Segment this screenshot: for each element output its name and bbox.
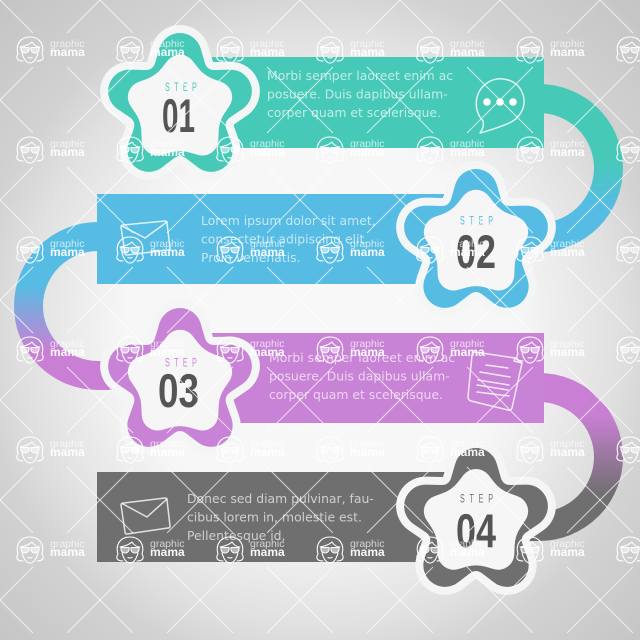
- watermark tiles: mama: [450, 345, 485, 359]
- watermark tiles: graphic: [50, 238, 84, 250]
- watermark tiles: graphic: [50, 338, 84, 350]
- step 4 star badge: STEP: [460, 493, 493, 506]
- watermark tiles: mama: [150, 345, 185, 359]
- panel: step 2 banner: [97, 194, 470, 284]
- watermark tiles: mama: [250, 45, 285, 59]
- text block: step 3: [269, 350, 455, 402]
- watermark tiles: mama: [250, 345, 285, 359]
- text block: step 2: consectetur adipiscing elit.: [201, 232, 368, 246]
- watermark tiles: mama: [550, 45, 585, 59]
- panel: step 1 banner: [200, 57, 544, 148]
- watermark tiles: mama: [150, 245, 185, 259]
- text block: step 2: [201, 213, 376, 265]
- watermark tiles: mama: [150, 545, 185, 559]
- icon: document: [468, 352, 522, 410]
- watermark tiles: mama: [350, 45, 385, 59]
- text block: step 3: Morbi semper laoreet enim ac: [269, 350, 455, 365]
- step 1 star badge: 01: [162, 89, 195, 142]
- watermark tiles: mama: [50, 545, 85, 559]
- watermark tiles: mama: [50, 445, 85, 459]
- step 2 star badge: STEP: [460, 215, 493, 228]
- text block: step 4: Pellentesque id,: [187, 528, 285, 543]
- watermark tiles: mama: [250, 145, 285, 159]
- text block: step 1: [267, 68, 453, 120]
- watermark tiles: graphic: [450, 538, 484, 550]
- step 4 star badge: 04: [456, 504, 496, 557]
- step 4 star badge: [404, 448, 548, 587]
- watermark tiles: graphic: [350, 238, 384, 250]
- watermark tiles: mama: [50, 345, 85, 359]
- text block: step 3: corper quam et scelerisque.: [269, 387, 443, 402]
- watermark tiles: graphic: [550, 538, 584, 550]
- watermark tiles: mama: [350, 545, 385, 559]
- watermark tiles: graphic: [150, 38, 184, 50]
- panel: step 4 banner: [97, 472, 470, 562]
- watermark tiles: graphic: [350, 38, 384, 50]
- step 1 star badge: STEP: [165, 81, 197, 95]
- watermark tiles: mama: [250, 545, 285, 559]
- watermark tiles: mama: [550, 345, 585, 359]
- watermark tiles: mama: [550, 145, 585, 159]
- text block: step 4: [187, 491, 374, 543]
- watermark tiles: graphic: [50, 38, 84, 50]
- watermark tiles: graphic: [150, 138, 184, 150]
- watermark tiles: graphic: [250, 238, 284, 250]
- watermark tiles: graphic: [350, 538, 384, 550]
- watermark tiles: mama: [450, 445, 485, 459]
- watermark tiles: graphic: [550, 238, 584, 250]
- watermark tiles: graphic: [250, 438, 284, 450]
- step 3 star badge: [108, 308, 252, 447]
- watermark tiles: mama: [550, 245, 585, 259]
- watermark tiles: graphic: [150, 538, 184, 550]
- watermark tiles: mama: [450, 45, 485, 59]
- text block: step 4: cibus lorem in, molestie est.: [187, 510, 362, 524]
- watermark tiles: mama: [50, 145, 85, 159]
- watermark tiles: graphic: [550, 338, 584, 350]
- watermark tiles: mama: [150, 45, 185, 59]
- watermark tiles: graphic: [150, 438, 184, 450]
- watermark tiles: graphic: [50, 438, 84, 450]
- watermark tiles: graphic: [250, 138, 284, 150]
- watermark tiles: graphic: [450, 438, 484, 450]
- watermark tiles: mama: [450, 145, 485, 159]
- text block: step 1: corper quam et scelerisque.: [267, 105, 441, 120]
- step 2 star badge: [404, 169, 548, 308]
- watermark tiles: mama: [350, 345, 385, 359]
- watermark tiles: mama: [150, 145, 185, 159]
- watermark tiles: graphic: [550, 138, 584, 150]
- watermark tiles: mama: [350, 145, 385, 159]
- watermark tiles: mama: [150, 445, 185, 459]
- watermark tiles: mama: [450, 545, 485, 559]
- watermark tiles: graphic: [150, 338, 184, 350]
- watermark tiles: graphic: [450, 38, 484, 50]
- icon: envelope on gray banner: [121, 498, 170, 534]
- icon: envelope on blue banner: [121, 221, 170, 255]
- step 3 star badge: 03: [158, 364, 199, 417]
- text block: step 4: Donec sed diam pulvinar, fau-: [187, 491, 374, 506]
- text block: step 2: Lorem ipsum dolor sit amet,: [201, 213, 376, 228]
- text block: step 1: Morbi semper laoreet enim ac: [267, 68, 453, 83]
- watermark tiles: graphic: [150, 238, 184, 250]
- watermark tiles: graphic: [450, 138, 484, 150]
- watermark tiles: mama: [550, 445, 585, 459]
- watermark tiles: graphic: [50, 538, 84, 550]
- step 3 star badge: STEP: [165, 357, 197, 370]
- watermark tiles: graphic: [450, 238, 484, 250]
- watermark tiles: graphic: [250, 338, 284, 350]
- watermark tiles: graphic: [50, 138, 84, 150]
- text block: step 2: Proin venenatis.: [201, 250, 300, 265]
- text block: step 3: posuere. Duis dapibus ullam-: [269, 368, 450, 384]
- step 2 star badge: 02: [456, 225, 496, 278]
- watermark tiles: graphic: [350, 138, 384, 150]
- text block: step 1: posuere. Duis dapibus ullam-: [267, 86, 448, 102]
- watermark tiles: graphic: [450, 338, 484, 350]
- watermark tiles: mama: [550, 545, 585, 559]
- step 1 star badge: [108, 33, 252, 172]
- watermark tiles: mama: [50, 245, 85, 259]
- watermark tiles: mama: [350, 445, 385, 459]
- watermark tiles: graphic: [250, 38, 284, 50]
- connector arc: blue to purple: [29, 236, 125, 376]
- watermark tiles: mama: [250, 245, 285, 259]
- icon: chat bubble: [476, 79, 524, 133]
- connector arc: teal to blue: [500, 98, 608, 238]
- watermark tiles: mama: [350, 245, 385, 259]
- connector arc: purple to gray: [500, 388, 608, 526]
- panel: step 3 banner: [200, 333, 544, 423]
- watermark tiles: mama: [250, 445, 285, 459]
- watermark tiles: graphic: [250, 538, 284, 550]
- watermark tiles: graphic: [350, 338, 384, 350]
- watermark tiles: graphic: [550, 438, 584, 450]
- watermark tiles: graphic: [550, 38, 584, 50]
- watermark tiles: mama: [450, 245, 485, 259]
- watermark tiles: mama: [50, 45, 85, 59]
- watermark tiles: graphic: [350, 438, 384, 450]
